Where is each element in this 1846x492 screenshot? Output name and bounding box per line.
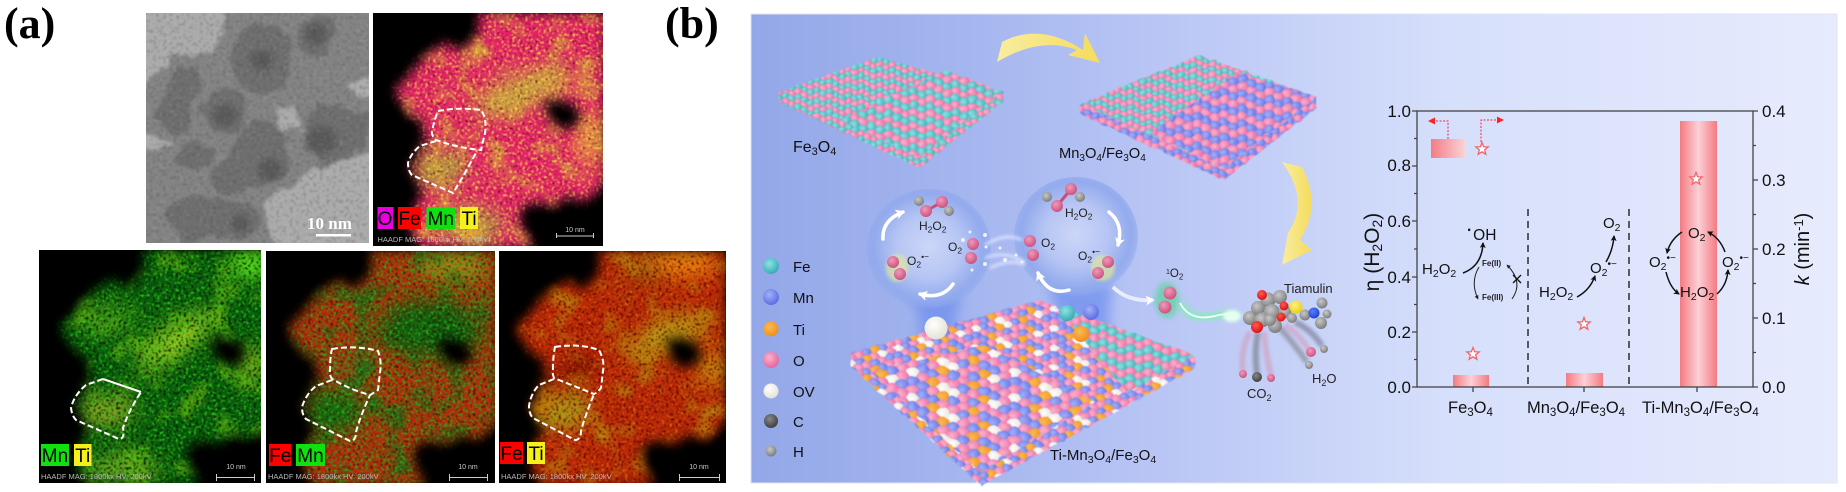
- chart: H2O2 efficiency and rate constant: [1361, 102, 1814, 419]
- label: Tiamulin: Tiamulin: [1284, 281, 1333, 296]
- label: O2 right: 2: [1050, 242, 1055, 252]
- legend chips: Fe: [269, 446, 291, 467]
- scheme: Mn3O4/Fe3O4 pathway: •−: [1608, 259, 1617, 270]
- left axis numbers: 0.4: [1387, 268, 1411, 287]
- instrument info: HAADF MAG: 1800kx HV: 200kV: [268, 472, 379, 481]
- legend chips: Mn: [42, 446, 68, 467]
- active sites: OV, Fe, Mn, Ti: [924, 304, 1099, 342]
- arrow: Mn3O4/Fe3O4 to Ti-Mn3O4/Fe3O4: [1282, 162, 1312, 265]
- scheme: Mn3O4/Fe3O4 pathway: 2: [1602, 267, 1608, 279]
- x axis labels: O: [1474, 399, 1487, 417]
- left axis title: 2: [1369, 219, 1385, 227]
- label: Ti-Mn3O4/Fe3O4: 3: [1133, 454, 1139, 466]
- molecule: singlet oxygen: [1155, 282, 1179, 318]
- lightning attack on Tiamulin: [1180, 303, 1241, 322]
- grain outline: [71, 379, 141, 439]
- arrow: singlet oxygen release: [1113, 287, 1153, 300]
- label: CO2: 2: [1266, 393, 1272, 403]
- bars: [1453, 121, 1717, 387]
- label: H2O2 left: 2: [942, 224, 947, 234]
- scheme: Fe3O4 pathway: 2: [1433, 268, 1439, 280]
- label: H2O2 left: 2: [928, 224, 933, 234]
- data stars: [1467, 172, 1702, 359]
- label: Mn3O4/Fe3O4: 4: [1096, 153, 1102, 164]
- right axis numbers: 0.1: [1762, 309, 1786, 328]
- x axis labels: /Fe: [1576, 399, 1599, 417]
- legend chips: Ti: [75, 446, 90, 467]
- label: Ti-Mn3O4/Fe3O4: 4: [1105, 454, 1111, 466]
- trails to degradation products: [1242, 322, 1322, 376]
- scheme: Ti-Mn3O4/Fe3O4 cycle: 2: [1708, 291, 1714, 303]
- left axis numbers: 0.6: [1387, 212, 1411, 231]
- label: Ti-Mn3O4/Fe3O4: Ti-Mn: [1050, 447, 1088, 464]
- scheme: Ti-Mn3O4/Fe3O4 cycle: [1649, 225, 1749, 303]
- x axis labels: O: [1739, 399, 1752, 417]
- scheme: Fe3O4 pathway: [1422, 222, 1521, 302]
- scale bar: [449, 464, 488, 481]
- label: superoxide left: •−: [921, 252, 929, 262]
- x axis labels: 3: [1550, 407, 1556, 419]
- dashed grain outline: [529, 346, 604, 440]
- instrument info: HAADF MAG: 1800kx HV: 200kV: [501, 472, 612, 481]
- axes frame: [1412, 111, 1758, 392]
- molecule: Tiamulin: [1243, 290, 1332, 333]
- scale bar: 10 nm: [689, 464, 709, 471]
- molecule: CO2: [1239, 370, 1275, 382]
- slab: Ti-Mn3O4/Fe3O4: [851, 300, 1195, 486]
- label: singlet oxygen: 2: [1179, 272, 1184, 282]
- left axis numbers: 0.2: [1387, 323, 1411, 342]
- legend chips: Ti: [528, 444, 544, 465]
- x axis labels: Fe: [1448, 399, 1467, 417]
- label: H2O: H: [1312, 371, 1321, 386]
- molecule: O2 right: [1024, 235, 1039, 261]
- scale label: 10 nm: [307, 214, 352, 233]
- scheme: Ti-Mn3O4/Fe3O4 cycle: O: [1649, 254, 1661, 271]
- panel label (b): (b): [665, 0, 719, 48]
- x axis labels: 4: [1487, 407, 1494, 419]
- label: superoxide left: 2: [916, 260, 921, 270]
- label: Fe3O4: Fe: [793, 139, 812, 156]
- legend chips: [41, 444, 92, 467]
- scale bar: 10 nm: [565, 227, 585, 234]
- slab: Mn3O4/Fe3O4: [1080, 55, 1316, 180]
- label: singlet oxygen: O: [1170, 268, 1179, 280]
- label: O2 left: O: [948, 240, 957, 254]
- scheme: Ti-Mn3O4/Fe3O4 cycle: O: [1697, 284, 1708, 301]
- x axis labels: 4: [1619, 407, 1626, 419]
- left axis numbers: 0.0: [1387, 378, 1411, 397]
- scheme: Ti-Mn3O4/Fe3O4 cycle: H: [1680, 284, 1691, 301]
- scheme: Mn3O4/Fe3O4 pathway: 2: [1615, 222, 1621, 234]
- left axis title: η (H: [1361, 252, 1384, 291]
- x axis labels: O: [1606, 399, 1619, 417]
- scheme: Fe3O4 pathway: H: [1422, 261, 1433, 278]
- right axis numbers: [1762, 102, 1786, 397]
- label: Mn3O4/Fe3O4: 3: [1079, 153, 1085, 164]
- label: H2O2 left: H: [919, 219, 928, 233]
- slab: Fe3O4: [779, 57, 1003, 168]
- label: H2O: 2: [1321, 378, 1326, 388]
- label: O2 right: O: [1041, 236, 1050, 250]
- scheme: Fe3O4 pathway: ·: [1467, 222, 1472, 239]
- legend: atom key: C: [793, 414, 804, 431]
- label: H2O2 right: O: [1078, 206, 1088, 220]
- x axis labels: 3: [1467, 407, 1474, 419]
- scheme: Ti-Mn3O4/Fe3O4 cycle: •−: [1740, 253, 1749, 264]
- stems linking bubbles to surface: [905, 285, 1115, 345]
- exchange wisps between bubbles: [961, 230, 1025, 272]
- x axis labels: O: [1556, 399, 1569, 417]
- legend chips: Ti: [461, 209, 477, 230]
- bubble: left reaction cycle: [867, 189, 991, 309]
- legend key: bar and star with axis arrows: [1429, 120, 1503, 158]
- panel: TEM micrograph: [146, 13, 369, 243]
- label: Fe3O4: 3: [812, 146, 818, 158]
- molecule: superoxide left: [886, 254, 908, 282]
- x axis labels: 4: [1703, 407, 1710, 419]
- legend chips: [500, 442, 545, 465]
- label: Mn3O4/Fe3O4: Mn: [1059, 146, 1079, 162]
- panel: Mn Ti elemental map: [39, 250, 261, 483]
- scheme: Mn3O4/Fe3O4 pathway: H: [1539, 284, 1550, 301]
- label: Ti-Mn3O4/Fe3O4: O: [1094, 447, 1105, 464]
- x axis labels: Ti-Mn: [1642, 399, 1684, 417]
- legend: atom key: OV: [793, 384, 815, 401]
- molecule: H2O2 right: [1042, 183, 1085, 212]
- scheme: Mn3O4/Fe3O4 pathway: O: [1603, 215, 1615, 232]
- panel: O Fe Mn Ti elemental map: [373, 13, 603, 246]
- x axis labels: 4: [1752, 407, 1759, 419]
- x axis labels: /Fe: [1709, 399, 1733, 417]
- legend chips: Mn: [428, 209, 454, 230]
- scale bar: [316, 234, 351, 236]
- scheme: Fe3O4 pathway: OH: [1473, 227, 1496, 244]
- label: Mn3O4/Fe3O4: O: [1085, 146, 1096, 162]
- legend: atom key: [763, 258, 815, 461]
- legend: atom key: Ti: [793, 322, 805, 339]
- scheme: Mn3O4/Fe3O4 pathway: O: [1590, 260, 1602, 277]
- label: Ti-Mn3O4/Fe3O4: /Fe: [1111, 447, 1133, 464]
- label: Fe3O4: O: [818, 139, 830, 156]
- panel label (a): (a): [4, 0, 55, 48]
- label: Ti-Mn3O4/Fe3O4: 3: [1088, 454, 1094, 466]
- label: H2O2 right: 2: [1088, 212, 1093, 222]
- scheme: Ti-Mn3O4/Fe3O4 cycle: 2: [1734, 261, 1740, 273]
- scale bar: 10 nm: [458, 464, 478, 471]
- molecule: superoxide right: [1091, 255, 1115, 281]
- arrow: Fe3O4 to Mn3O4/Fe3O4: [997, 33, 1100, 63]
- scheme: Fe3O4 pathway: Fe(III): [1482, 293, 1504, 302]
- scheme: Ti-Mn3O4/Fe3O4 cycle: 2: [1661, 261, 1667, 273]
- scale bar: 10 nm: [226, 464, 246, 471]
- label: H2O2 right: H: [1065, 206, 1074, 220]
- label: Mn3O4/Fe3O4: 3: [1123, 153, 1129, 164]
- label: Ti-Mn3O4/Fe3O4: 4: [1150, 454, 1156, 466]
- scheme: Ti-Mn3O4/Fe3O4 cycle: 2: [1700, 232, 1706, 244]
- scheme: Ti-Mn3O4/Fe3O4 cycle: O: [1722, 254, 1734, 271]
- legend: atom key: Fe: [793, 259, 811, 276]
- arrows: cycle arrows in bubbles: [883, 212, 1120, 296]
- scheme: Fe3O4 pathway: 2: [1450, 268, 1456, 280]
- legend chips: [378, 207, 478, 230]
- instrument info: HAADF MAG: 1800kx HV: 200kV: [378, 235, 488, 244]
- label: Mn3O4/Fe3O4: O: [1129, 146, 1140, 162]
- label: superoxide right: •−: [1092, 246, 1100, 256]
- legend chips: [269, 444, 325, 467]
- dashed grain outline: [302, 347, 381, 441]
- x axis labels: 4: [1569, 407, 1576, 419]
- x axis labels: 3: [1733, 407, 1739, 419]
- molecule: O2 left: [965, 238, 979, 264]
- label: superoxide right: O: [1078, 249, 1087, 263]
- label: H2O2 right: 2: [1074, 212, 1079, 222]
- scheme: Mn3O4/Fe3O4 pathway: 2: [1567, 291, 1573, 303]
- label: CO2: CO: [1247, 386, 1266, 401]
- x axis labels: [1448, 399, 1759, 419]
- scheme: Fe3O4 pathway: O: [1439, 261, 1450, 278]
- left axis numbers: 1.0: [1387, 102, 1411, 121]
- left axis numbers: 0.8: [1387, 156, 1411, 175]
- x axis labels: 3: [1684, 407, 1690, 419]
- x axis labels: 3: [1599, 407, 1606, 419]
- right axis title: -1: [1791, 219, 1806, 231]
- scale bar: [556, 227, 594, 238]
- scheme: Ti-Mn3O4/Fe3O4 cycle: 2: [1691, 291, 1697, 303]
- x axis labels: Mn: [1527, 399, 1550, 417]
- label: superoxide right: 2: [1087, 254, 1092, 264]
- right axis numbers: 0.0: [1762, 378, 1786, 397]
- molecule: H2O2 left: [914, 196, 954, 217]
- dashed grain outline: [408, 109, 486, 193]
- left axis title: O: [1361, 227, 1384, 244]
- label: Fe3O4: 4: [830, 146, 836, 158]
- label: O2 left: 2: [957, 246, 962, 256]
- scheme: Mn3O4/Fe3O4 pathway: O: [1556, 284, 1567, 301]
- scheme: Fe3O4 pathway: Fe(II): [1482, 259, 1501, 268]
- legend chips: Mn: [297, 446, 324, 467]
- legend chips: Fe: [398, 209, 421, 230]
- panel: Fe Mn elemental map: [266, 251, 495, 483]
- legend: atom key: O: [793, 353, 805, 370]
- scheme: Ti-Mn3O4/Fe3O4 cycle: O: [1688, 225, 1700, 242]
- right axis numbers: 0.3: [1762, 171, 1786, 190]
- label: Ti-Mn3O4/Fe3O4: O: [1139, 447, 1150, 464]
- panel: Fe Ti elemental map: [499, 251, 726, 483]
- left axis title: 2: [1369, 244, 1385, 252]
- right axis numbers: 0.4: [1762, 102, 1786, 121]
- legend chips: Fe: [500, 444, 523, 465]
- right axis title: ): [1792, 213, 1814, 219]
- scheme: Ti-Mn3O4/Fe3O4 cycle: •−: [1667, 253, 1676, 264]
- right axis numbers: 0.2: [1762, 240, 1786, 259]
- region dividers: [1528, 209, 1629, 387]
- panel: catalytic mechanism and kinetics background: [751, 14, 1837, 483]
- scheme: Mn3O4/Fe3O4 pathway: 2: [1550, 291, 1556, 303]
- instrument info: HAADF MAG: 1800kx HV: 200kV: [41, 472, 152, 481]
- legend: atom key: H: [793, 444, 804, 461]
- legend chips: O: [378, 209, 392, 230]
- bubble: right reaction cycle: [1014, 177, 1138, 297]
- left axis title: ): [1361, 213, 1384, 220]
- label: H2O: O: [1326, 371, 1337, 386]
- x axis labels: O: [1690, 399, 1703, 417]
- label: singlet oxygen: 1: [1166, 269, 1170, 276]
- scale bar: [679, 464, 720, 481]
- scale bar: [216, 464, 255, 481]
- label: H2O2 left: O: [932, 219, 942, 233]
- label: superoxide left: O: [907, 254, 916, 268]
- right axis title: k (min: [1792, 231, 1814, 285]
- legend: atom key: Mn: [793, 290, 814, 307]
- scheme: Mn3O4/Fe3O4 pathway: [1539, 215, 1621, 303]
- label: Mn3O4/Fe3O4: /Fe: [1102, 146, 1123, 162]
- molecule: H2O: [1305, 345, 1328, 369]
- label: Mn3O4/Fe3O4: 4: [1140, 153, 1146, 164]
- left axis numbers: [1387, 102, 1411, 397]
